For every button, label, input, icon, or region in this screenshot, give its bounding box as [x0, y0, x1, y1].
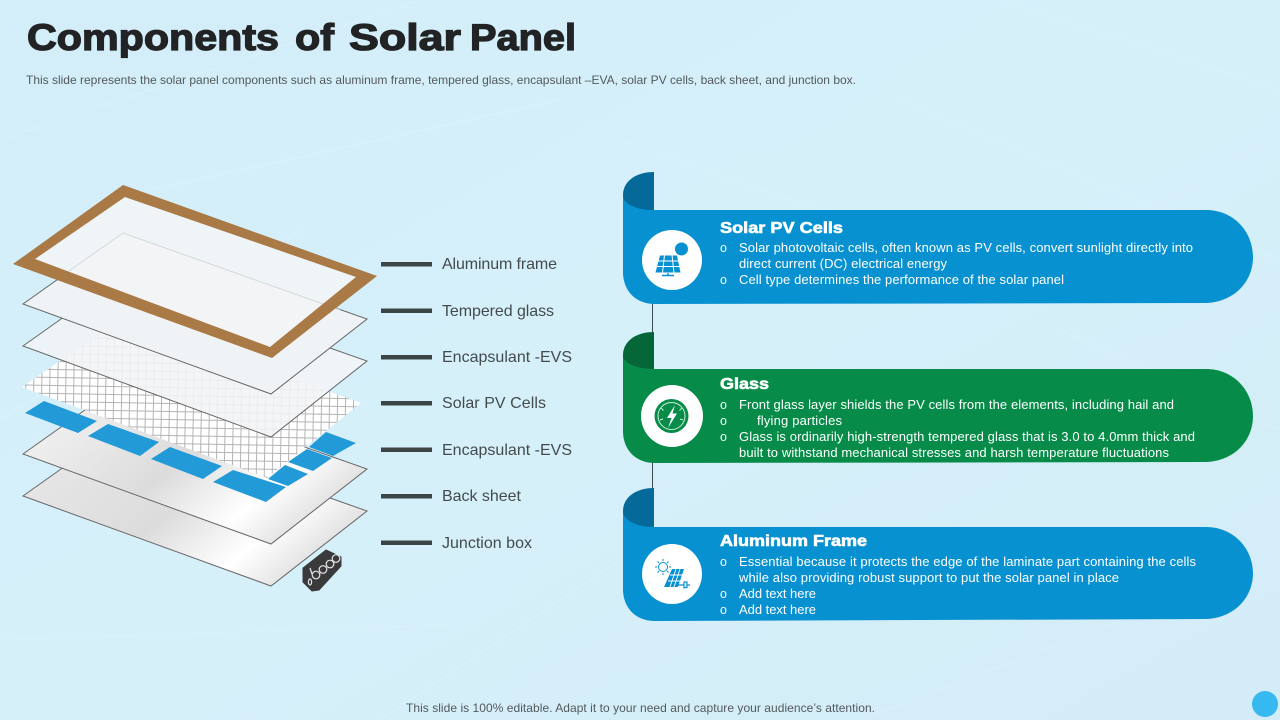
layer: tempered glass lower	[23, 275, 367, 437]
icon: solar panel and sun	[642, 230, 702, 290]
title: Components	[27, 17, 279, 58]
ribbon	[623, 511, 1253, 621]
bullet text: o	[720, 398, 727, 412]
label: aluminum frame	[381, 256, 557, 273]
panel: solar pv cells	[623, 172, 1253, 304]
label: back sheet: Back sheet	[442, 488, 522, 505]
bullet text: o	[720, 273, 727, 287]
label: encapsulant bottom: Encapsulant -EVS	[442, 442, 572, 459]
layer: tempered glass upper	[23, 233, 367, 394]
footer note: This slide is 100% editable. Adapt it to your need and capture your audience’s attention.	[406, 701, 875, 715]
heading: Glass	[720, 376, 769, 393]
bullet text: Front glass layer shields the PV cells from the elements, including hail and	[739, 397, 1174, 412]
label: back sheet	[381, 488, 522, 505]
bullet text: Solar photovoltaic cells, often known as PV cells, convert sunlight directly into	[739, 240, 1193, 255]
ribbon fold	[623, 172, 654, 210]
title: Panel	[470, 17, 576, 58]
ribbon fold	[623, 332, 654, 369]
bullet text: while also providing robust support to put the solar panel in place	[738, 570, 1119, 585]
bullet text: o	[720, 555, 727, 569]
panel: aluminum frame	[623, 488, 1253, 621]
bullet text: Essential because it protects the edge of the laminate part containing the cells	[739, 554, 1196, 569]
bullet text: Add text here	[739, 602, 816, 617]
layer: lower back sheet	[23, 425, 367, 586]
bullet text: o	[720, 603, 727, 617]
layer: aluminum frame	[13, 185, 377, 358]
bullet text: o	[720, 414, 727, 428]
bullet text: built to withstand mechanical stresses and harsh temperature fluctuations	[739, 445, 1170, 460]
ribbon fold	[623, 488, 654, 527]
label: tempered glass: Tempered glass	[442, 303, 554, 320]
label: encapsulant bottom	[381, 442, 572, 459]
label: junction box: Junction box	[442, 535, 532, 552]
bullet text: o	[720, 430, 727, 444]
label: solar pv cells	[381, 395, 546, 412]
icon: sun and plugged panel	[642, 544, 702, 604]
junction box	[303, 550, 341, 591]
ribbon	[623, 355, 1253, 463]
label rows	[381, 256, 572, 552]
heading: Solar PV Cells	[720, 220, 843, 237]
bullet text: Add text here	[739, 586, 816, 601]
label: encapsulant top	[381, 349, 572, 366]
bullet text: o	[720, 241, 727, 255]
label: aluminum frame: Aluminum frame	[442, 256, 557, 273]
connector line	[652, 300, 654, 490]
bullet text: Cell type determines the performance of the solar panel	[739, 272, 1064, 287]
bullet text: direct current (DC) electrical energy	[739, 256, 948, 271]
panel: glass	[623, 332, 1253, 463]
title	[27, 17, 576, 58]
ribbon	[623, 195, 1253, 304]
label: encapsulant top: Encapsulant -EVS	[442, 349, 572, 366]
bullet text: flying particles	[757, 413, 842, 428]
bullet text: o	[720, 587, 727, 601]
bullet text: Glass is ordinarily high-strength tempered glass that is 3.0 to 4.0mm thick and	[739, 429, 1195, 444]
label: tempered glass	[381, 303, 554, 320]
title: Solar	[349, 17, 461, 58]
bullet text	[720, 240, 1193, 287]
heading: Aluminum Frame	[720, 533, 867, 550]
label: solar pv cells: Solar PV Cells	[442, 395, 546, 412]
corner dot	[1252, 691, 1278, 717]
label: junction box	[381, 535, 532, 552]
layer: mesh encapsulant	[22, 318, 361, 478]
bullet text	[720, 554, 1196, 617]
icon: energy gauge	[641, 385, 703, 447]
bullet text	[720, 397, 1195, 460]
title: of	[295, 17, 335, 58]
layer: encapsulant sheet	[23, 383, 367, 544]
subtitle: This slide represents the solar panel components such as aluminum frame, tempered glass, encapsulant –EVA, solar PV cells, back sheet, and junction box.	[26, 73, 856, 87]
layer: blue solar cells	[25, 401, 356, 502]
exploded solar panel diagram	[13, 185, 377, 591]
